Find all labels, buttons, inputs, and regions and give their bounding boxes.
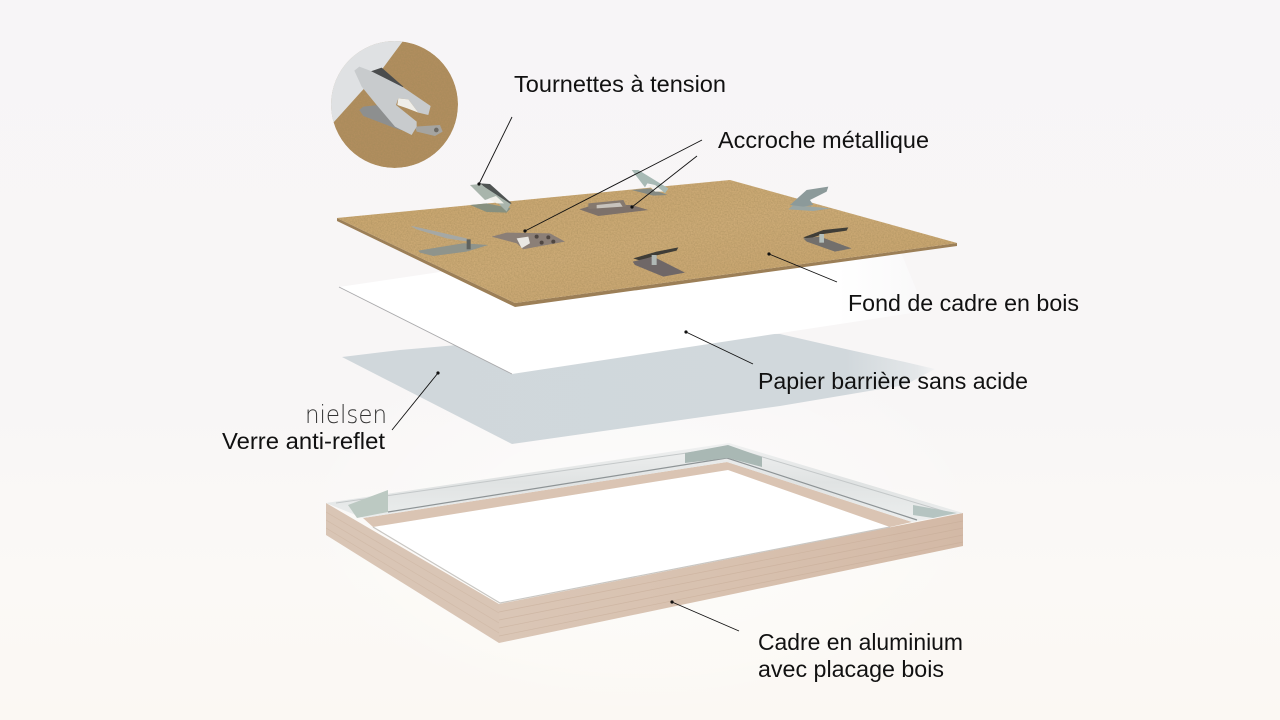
clip: lower right tension clip (803, 227, 852, 252)
pointer: hanger centre (630, 156, 697, 209)
frame: aluminium profile (326, 443, 963, 522)
pointer: frame (670, 600, 739, 631)
pointer: tension clip (477, 117, 512, 186)
label: aluminium frame: Cadre en aluminium (758, 629, 963, 655)
frame: inner wood strip (363, 462, 912, 527)
frame: wooden veneer faces (326, 503, 963, 643)
clip: left metal hanger (492, 233, 565, 249)
label: anti-reflective glass: Verre anti-reflet (222, 428, 386, 454)
frame: corner bracket right (913, 505, 957, 518)
pointer: paper (684, 330, 753, 364)
frame: white inner opening (373, 470, 890, 603)
clip: top-left tension clip (470, 183, 512, 213)
inset: close-up of tension clip (331, 41, 458, 168)
label: metal hanger: Accroche métallique (718, 127, 929, 153)
pointer: wooden back (767, 252, 837, 282)
label: aluminium frame: avec placage bois (758, 656, 944, 682)
layer: white acid-free paper (339, 250, 925, 374)
layer: wooden backing board (337, 180, 957, 307)
frame: corner bracket back (685, 445, 762, 467)
pointer: hanger left (523, 140, 702, 233)
label: wooden back: Fond de cadre en bois (848, 290, 1079, 316)
clip: top centre tension clip (632, 170, 668, 196)
clip: left lying tension clip (411, 226, 488, 256)
clip: top right tension clip (788, 187, 831, 211)
clip: lower centre tension clip (633, 247, 685, 277)
layer: glass sheet (342, 334, 935, 444)
label: acid-free paper: Papier barrière sans acide (758, 368, 1028, 394)
frame: inner silver lip (373, 527, 890, 603)
label: aluminium frame (758, 629, 963, 682)
logo: nielsen: nielsen (305, 400, 387, 429)
paper left edge line (339, 287, 512, 374)
pointer: glass (392, 371, 440, 430)
frame: corner bracket left (348, 490, 388, 518)
clip: centre metal hanger (579, 200, 648, 216)
label: tension clips: Tournettes à tension (514, 71, 726, 97)
